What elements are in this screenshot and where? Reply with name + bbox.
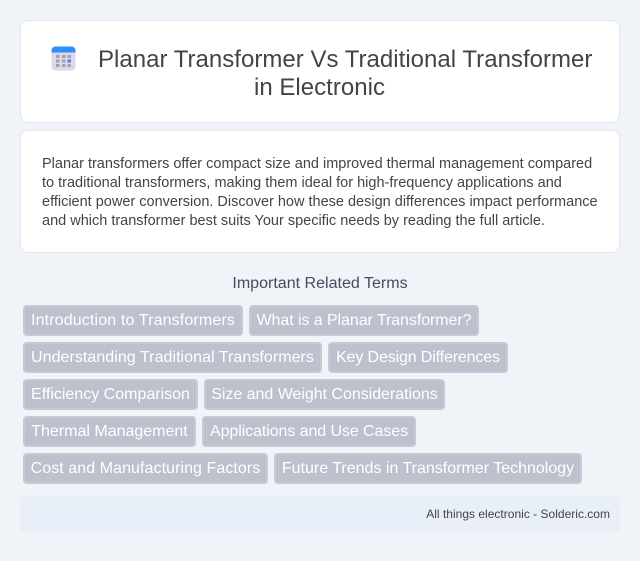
tag: Efficiency Comparison — [31, 386, 190, 403]
intro paragraph: and which transformer best suits Your specific needs by reading the full article. — [42, 213, 545, 229]
icon: calendar — [52, 46, 76, 70]
tag — [249, 305, 479, 336]
intro paragraph: Planar transformers offer compact size and improved thermal management compared — [42, 156, 592, 172]
tag group: related terms — [23, 305, 582, 484]
tag — [202, 416, 416, 447]
tag: Future Trends in Transformer Technology — [282, 460, 574, 477]
tag — [23, 453, 268, 484]
heading: related terms: Important Related Terms — [232, 274, 408, 292]
tag — [23, 305, 243, 336]
footer text: All things electronic - Solderic.com — [426, 507, 610, 521]
panel: header card — [20, 20, 620, 123]
tag — [23, 416, 196, 447]
tag — [23, 342, 322, 373]
intro paragraph: efficient power conversion. Discover how these design differences impact performance — [42, 194, 598, 210]
intro paragraph: to traditional transformers, making them ideal for high-frequency applications and — [42, 175, 562, 191]
tag: Cost and Manufacturing Factors — [31, 460, 260, 477]
tag: Thermal Management — [31, 423, 188, 440]
tag: Applications and Use Cases — [210, 423, 408, 440]
tag — [204, 379, 445, 410]
footer bar — [20, 497, 620, 531]
tag: Key Design Differences — [336, 349, 500, 366]
title: in Electronic — [254, 74, 385, 101]
title: Planar Transformer Vs Traditional Transformer — [98, 46, 592, 73]
tag: What is a Planar Transformer? — [257, 312, 471, 329]
tag — [274, 453, 582, 484]
tag — [328, 342, 508, 373]
tag: Understanding Traditional Transformers — [31, 349, 314, 366]
intro paragraph — [42, 156, 598, 229]
title — [98, 46, 592, 101]
tag — [23, 379, 198, 410]
tag: Size and Weight Considerations — [211, 386, 438, 403]
panel: intro text card — [20, 130, 620, 253]
tag: Introduction to Transformers — [31, 312, 235, 329]
